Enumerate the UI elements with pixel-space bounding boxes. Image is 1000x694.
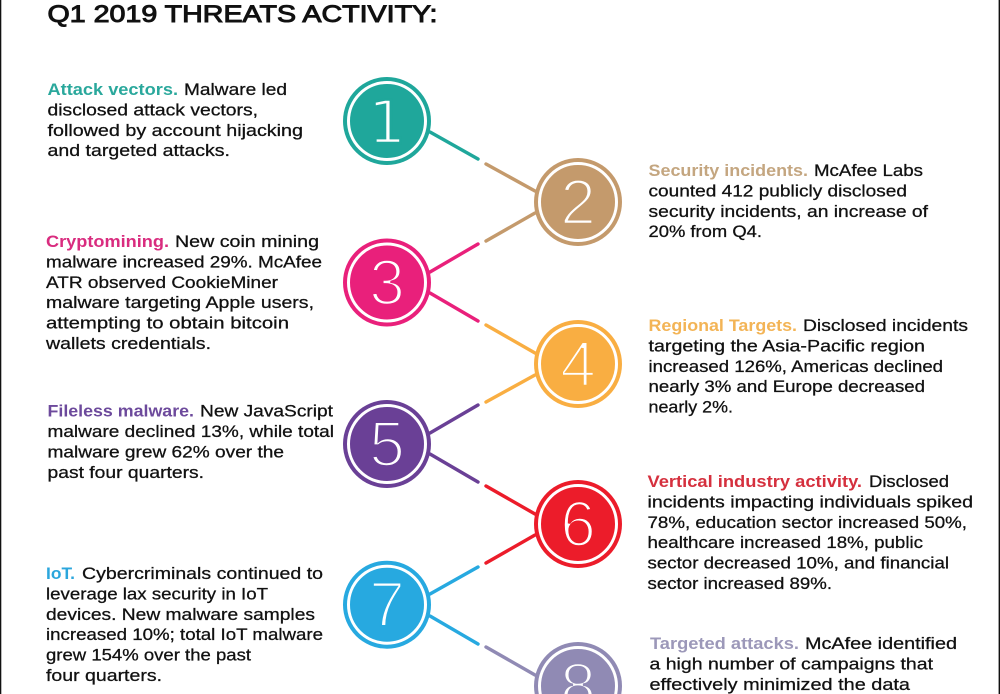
text block: fileless malware [48, 402, 334, 482]
text block: IoT [46, 564, 323, 685]
text block: IoT: leverage lax security in IoT [46, 584, 268, 603]
text block: vertical industry activity: 78%, education sector increased 50%, [648, 513, 967, 532]
text block: security incidents [648, 161, 928, 241]
text block: vertical industry activity: healthcare increased 18%, public [648, 533, 924, 552]
text block: security incidents: 20% from Q4. [648, 222, 762, 241]
text block: attack vectors [48, 80, 303, 160]
text block: IoT: devices. New malware samples [46, 605, 315, 624]
icon: number 3 badge [343, 238, 431, 326]
icon: number 7 badge [343, 561, 431, 649]
icon: number 2 badge: 2 [560, 166, 596, 238]
icon: number 5 badge [343, 400, 431, 488]
title: Q1 2019 THREATS ACTIVITY: [48, 1, 438, 28]
text block: vertical industry activity: Vertical industry activity. [648, 472, 862, 491]
text block: security incidents: Security incidents. [648, 161, 808, 180]
text block: security incidents: security incidents, an increase of [648, 202, 928, 221]
text block: IoT: IoT. [46, 564, 75, 583]
text block: targeted attacks [650, 634, 957, 694]
icon: number 1 badge: 1 [368, 88, 406, 158]
text block: IoT: increased 10%; total IoT malware [46, 625, 323, 644]
text block: vertical industry activity: Disclosed [869, 472, 949, 491]
text block: fileless malware: New JavaScript [200, 402, 333, 421]
connector lines [430, 132, 535, 675]
icon: number 5 badge: 5 [369, 408, 405, 480]
text block: security incidents: McAfee Labs [814, 161, 923, 180]
text block: fileless malware: malware grew 62% over the [48, 442, 284, 462]
icon: number 1 badge [343, 77, 431, 165]
text block: IoT: four quarters. [46, 666, 162, 685]
text block: regional targets: nearly 2%. [648, 398, 733, 417]
text block: cryptomining: New coin mining [175, 232, 319, 251]
icon: number 8 badge [534, 642, 622, 694]
text block: regional targets [648, 316, 968, 417]
text block: regional targets: targeting the Asia-Pacific region [648, 336, 925, 355]
text block: cryptomining [45, 232, 322, 353]
text block: attack vectors: disclosed attack vectors, [48, 100, 258, 119]
text block: regional targets: nearly 3% and Europe decreased [648, 377, 925, 396]
text block: vertical industry activity: sector decreased 10%, and financial [648, 554, 949, 573]
text block: attack vectors: Attack vectors. [48, 80, 178, 99]
text block: attack vectors: Malware led [184, 80, 287, 99]
icon: number 3 badge: 3 [369, 246, 405, 318]
text block: fileless malware: Fileless malware. [48, 402, 194, 421]
icon: number 6 badge [534, 480, 622, 568]
text block: fileless malware: malware declined 13%, while total [48, 422, 334, 441]
text block: attack vectors: followed by account hijacking [48, 121, 303, 140]
text block: IoT: grew 154% over the past [46, 646, 251, 665]
text block: attack vectors: and targeted attacks. [48, 141, 230, 160]
text block: regional targets: increased 126%, Americas declined [648, 357, 943, 376]
text block: cryptomining: malware targeting Apple users, [46, 293, 314, 312]
text block: fileless malware: past four quarters. [48, 463, 204, 482]
text block: regional targets: Regional Targets. [648, 316, 797, 335]
text block: vertical industry activity [648, 472, 973, 593]
text block: targeted attacks: Targeted attacks. [650, 634, 799, 653]
icon: number 4 badge: 4 [560, 328, 596, 400]
icon: number 6 badge: 6 [560, 488, 596, 560]
text block: cryptomining: ATR observed CookieMiner [46, 273, 278, 292]
text block: cryptomining: attempting to obtain bitcoin [46, 314, 289, 333]
text block: vertical industry activity: incidents impacting individuals spiked [648, 492, 973, 511]
text block: security incidents: counted 412 publicly disclosed [648, 181, 907, 200]
icon: number 7 badge: 7 [369, 569, 405, 641]
icon: number 4 badge [534, 320, 622, 408]
text block: cryptomining: malware increased 29%. McAfee [46, 252, 322, 271]
text block: targeted attacks: a high number of campaigns that [650, 654, 933, 673]
text block: vertical industry activity: sector increased 89%. [648, 574, 832, 593]
text block: regional targets: Disclosed incidents [803, 316, 968, 335]
text block: cryptomining: wallets credentials. [45, 334, 211, 353]
text block: cryptomining: Cryptomining. [46, 232, 169, 251]
text block: targeted attacks: McAfee identified [805, 634, 957, 653]
text block: targeted attacks: effectively minimized the data [650, 675, 911, 694]
icon: number 2 badge [534, 158, 622, 246]
text block: IoT: Cybercriminals continued to [82, 564, 323, 583]
